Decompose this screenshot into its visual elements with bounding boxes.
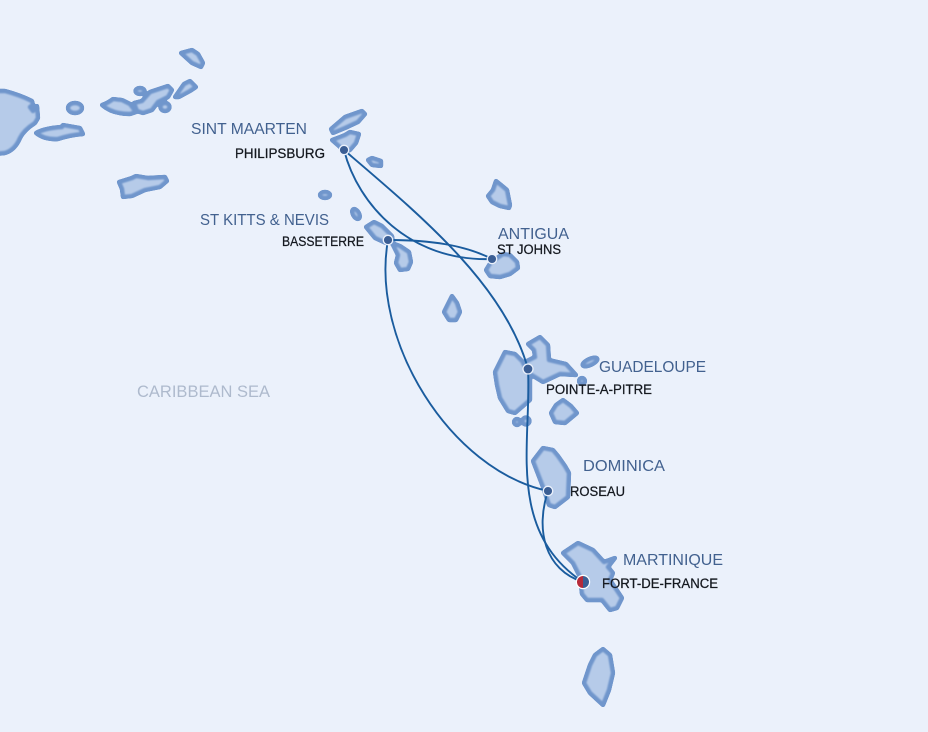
islands (0, 50, 622, 705)
label: Pointe-a-Pitre: POINTE-A-PITRE (546, 382, 652, 397)
home port marker: Fort-de-France (576, 575, 590, 589)
port markers (339, 145, 553, 496)
label: Fort-de-France: FORT-DE-FRANCE (602, 576, 718, 591)
label: Sint Maarten: SINT MAARTEN (191, 121, 307, 138)
label: Philipsburg: PHILIPSBURG (235, 146, 325, 161)
label: St Johns: ST JOHNS (497, 242, 561, 257)
label: Basseterre: BASSETERRE (282, 234, 364, 249)
sea label: CARIBBEAN SEA (137, 382, 271, 401)
label: Martinique: MARTINIQUE (623, 552, 723, 569)
cruise routes (344, 150, 583, 582)
label: Antigua: ANTIGUA (498, 226, 569, 243)
label: Roseau: ROSEAU (570, 484, 625, 499)
label: St Kitts and Nevis: ST KITTS & NEVIS (200, 212, 329, 229)
label: Dominica: DOMINICA (583, 458, 665, 475)
label: Guadeloupe: GUADELOUPE (599, 359, 706, 376)
